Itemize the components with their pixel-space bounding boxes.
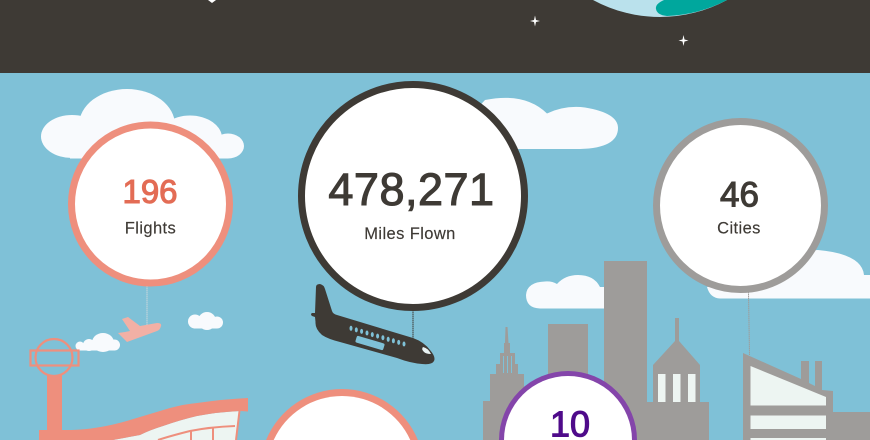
control tower (30, 339, 78, 440)
panel: miles flown (302, 84, 524, 308)
panel: salmon circle bottom (266, 389, 418, 440)
star (530, 16, 540, 26)
icon: small plane (118, 317, 161, 342)
panel: flights (72, 125, 230, 283)
icon: large plane (311, 284, 434, 364)
connector: flights (146, 286, 148, 326)
plane windows (350, 326, 406, 350)
star (678, 35, 688, 46)
plane cockpit (422, 347, 431, 354)
connector: cities (748, 292, 750, 355)
value: miles: 478,271 (328, 164, 495, 215)
moon (593, 0, 727, 17)
mid building (548, 324, 588, 440)
value: cities: 46 (720, 176, 759, 214)
cloud: mid (526, 275, 606, 308)
label: cities: Cities (717, 220, 761, 238)
label: miles: Miles Flown (364, 225, 456, 243)
cloud: small right of plane (188, 312, 223, 330)
cloud: behind miles (474, 98, 618, 149)
domed building (647, 318, 709, 440)
value: flights: 196 (122, 173, 178, 210)
star (208, 0, 216, 3)
connector: miles (412, 310, 414, 340)
label: flights: Flights (125, 220, 176, 238)
cloud: top left (41, 89, 244, 161)
empire building (483, 327, 560, 440)
cloud: right (707, 250, 870, 298)
cloud: small by tower (76, 333, 120, 352)
panel: purple circle (499, 371, 637, 440)
slanted building (743, 353, 833, 440)
tower building (604, 261, 647, 440)
skyline (483, 261, 870, 440)
night band (0, 0, 870, 73)
terminal building (39, 398, 248, 440)
panel: cities (656, 122, 824, 290)
low building right (830, 412, 870, 440)
